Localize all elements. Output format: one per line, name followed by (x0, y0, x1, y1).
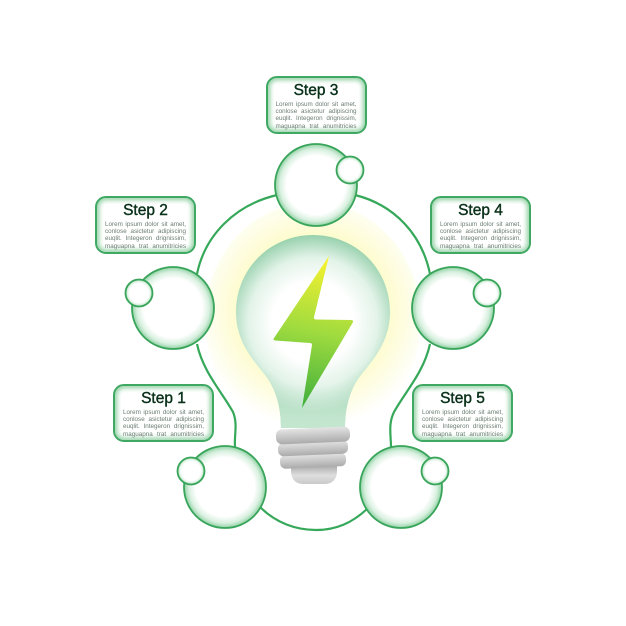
card: step 2: Lorem ipsum dolor sit amet, (105, 221, 186, 228)
card: step 5 (412, 384, 513, 442)
lightning bolt (273, 256, 353, 408)
card: step 2: euqlit. Integeron drignissim, (105, 235, 186, 242)
card: step 3 (266, 76, 366, 134)
card: step 2: conlose asictetur adipiscing (105, 228, 186, 235)
card: step 5: euqlit. Integeron drignissim, (422, 423, 503, 430)
card: step 4: maguapna trat anumitricies (440, 243, 521, 250)
circle: step 2 (126, 267, 214, 349)
card: step 5: Lorem ipsum dolor sit amet, (422, 409, 503, 416)
card: step 4: Lorem ipsum dolor sit amet, (440, 221, 521, 228)
card: step 1: euqlit. Integeron drignissim, (123, 423, 204, 430)
card: step 5: Step 5 (440, 390, 485, 406)
card: step 1 (113, 384, 214, 442)
circle: step 5 (360, 446, 448, 528)
card: step 1: Step 1 (141, 390, 186, 406)
card: step 2: Step 2 (123, 202, 168, 218)
card: step 5: maguapna trat anumitricies (422, 431, 503, 438)
card: step 5: conlose asictetur adipiscing (422, 416, 503, 423)
bulb base (276, 426, 350, 484)
card: step 4 (430, 196, 531, 254)
yellow glow (205, 202, 421, 438)
circle: step 4 (412, 267, 500, 349)
bulb outline (197, 195, 430, 530)
card: step 1: maguapna trat anumitricies (123, 431, 204, 438)
circle: step 3 (275, 144, 364, 226)
card: step 2 (95, 196, 196, 254)
card: step 3: Lorem ipsum dolor sit amet, (276, 101, 356, 108)
card: step 4: euqlit. Integeron drignissim, (440, 235, 521, 242)
circle: step 1 (178, 446, 266, 528)
card: step 3: maguapna trat anumitricies (276, 123, 356, 130)
card: step 4: conlose asictetur adipiscing (440, 228, 521, 235)
bulb neck shading (265, 375, 361, 428)
card: step 2: maguapna trat anumitricies (105, 243, 186, 250)
card: step 1: Lorem ipsum dolor sit amet, (123, 409, 204, 416)
bulb glass (236, 235, 390, 428)
card: step 1: conlose asictetur adipiscing (123, 416, 204, 423)
card: step 3: Step 3 (294, 82, 338, 98)
card: step 3: conlose asictetur adipiscing (276, 108, 356, 115)
card: step 4: Step 4 (458, 202, 503, 218)
card: step 3: euqlit. Integeron drignissim, (276, 115, 356, 122)
